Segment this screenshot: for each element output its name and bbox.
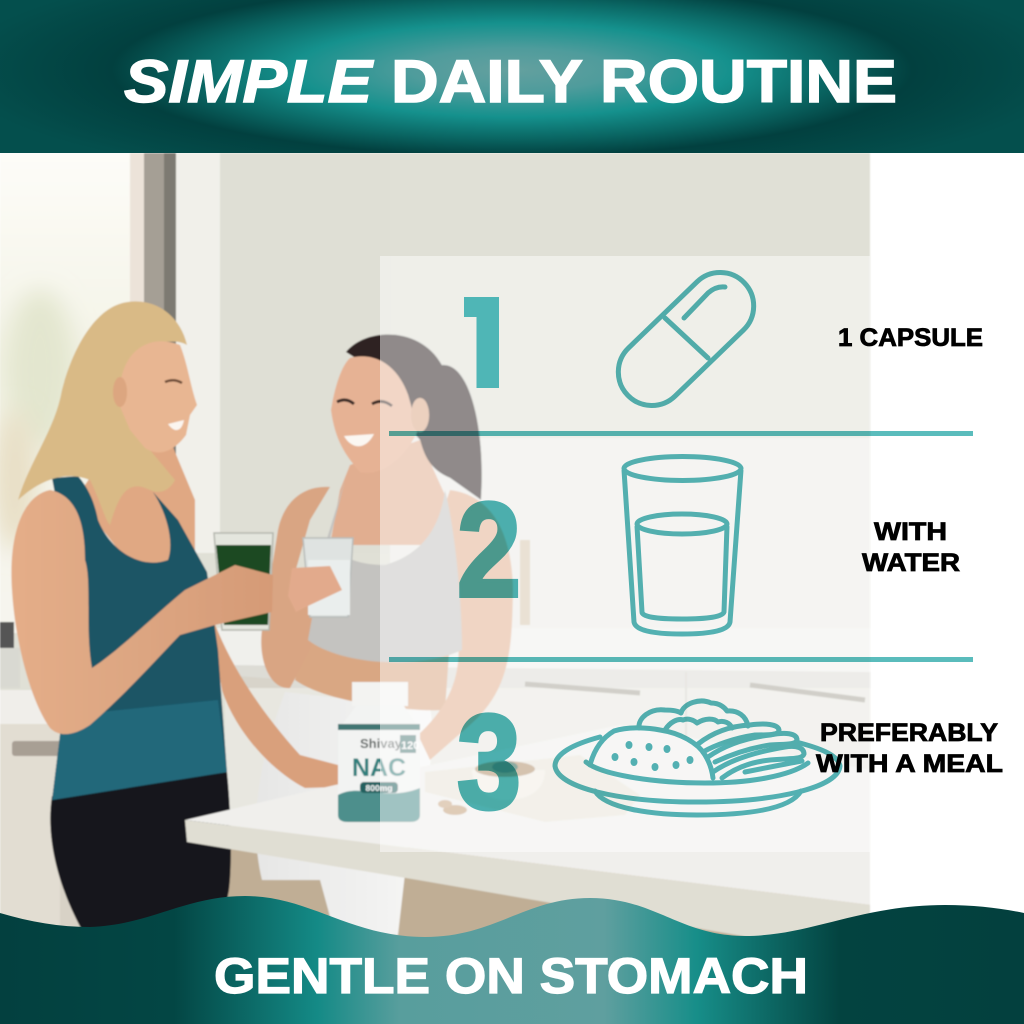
white leggings [256, 692, 433, 935]
footer text: GENTLE ON STOMACH [214, 948, 808, 1004]
header banner [0, 0, 1024, 153]
NAC supplement bottle: NAC [352, 754, 406, 782]
label: with water: WITH [874, 518, 947, 546]
far arm resting on counter [205, 590, 338, 788]
green drink glass [214, 533, 273, 630]
footer wave banner [0, 896, 1024, 1024]
translucent white panel [380, 256, 870, 852]
plate base [595, 791, 801, 815]
title [124, 48, 897, 115]
face [331, 356, 418, 473]
woman with ponytail, right [256, 334, 513, 935]
step 2 number: 2 [457, 476, 521, 625]
lettuce outer [639, 701, 748, 728]
NAC supplement bottle: 800mg [366, 783, 392, 793]
divider 2 [389, 657, 973, 662]
divider 1 [389, 431, 973, 436]
step 1 number: 1 [446, 274, 518, 420]
teal tank top [52, 476, 227, 800]
food bottom line [586, 762, 808, 783]
label: preferably with a meal [816, 719, 1003, 778]
pasta strands [698, 724, 779, 752]
ponytail and hair [346, 334, 482, 500]
label: 1 capsule: 1 CAPSULE [838, 324, 983, 352]
label: with water: WATER [862, 549, 960, 577]
step 3 number: 3 [457, 688, 521, 837]
hair [18, 301, 187, 525]
icon: glass of water [624, 456, 741, 634]
blonde woman, left [11, 301, 338, 930]
near arm and hand [11, 490, 273, 734]
water glass [303, 538, 353, 617]
neck and chest [330, 440, 450, 545]
NAC supplement bottle: 120 [401, 740, 419, 752]
NAC supplement bottle: Shivay [360, 736, 403, 751]
label: with water [862, 518, 960, 577]
icon: plate of food [555, 701, 840, 815]
title: SIMPLE [124, 48, 374, 115]
midriff [295, 640, 450, 710]
shoulder and arm on the left [261, 487, 330, 688]
black leggings [50, 772, 231, 930]
photo: two women in a kitchen with supplement bottle [0, 153, 870, 958]
face [115, 341, 197, 452]
hand holding glass [288, 566, 342, 612]
label: preferably with a meal: WITH A MEAL [816, 750, 1003, 778]
NAC supplement bottle [338, 682, 420, 822]
title: DAILY ROUTINE [391, 48, 897, 115]
plate rim [555, 737, 840, 802]
neck and chest [85, 425, 195, 590]
label: preferably with a meal: PREFERABLY [820, 719, 998, 747]
grey sports bra [308, 480, 462, 662]
icon: capsule [604, 259, 768, 419]
rice mound [590, 728, 713, 778]
kitchen background [0, 153, 870, 955]
rice grains [612, 741, 694, 771]
arm on the right [418, 490, 513, 760]
lettuce inner [665, 719, 732, 730]
white countertop [185, 725, 870, 958]
